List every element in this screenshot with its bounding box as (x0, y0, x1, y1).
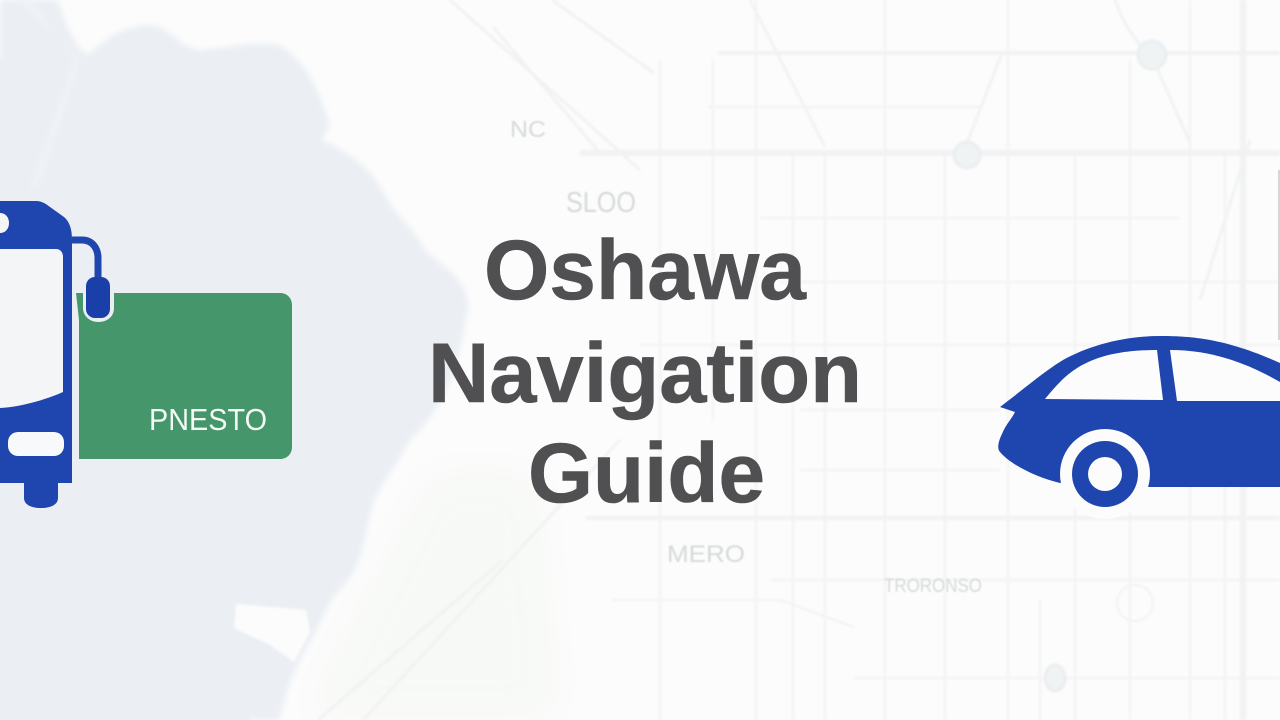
map: land tint (300, 470, 560, 720)
icon: PRESTO card: PNESTO (149, 402, 267, 437)
title (428, 223, 862, 520)
icon: bus (0, 201, 110, 508)
icon: PRESTO card (76, 293, 292, 459)
map: street grid (451, 0, 1279, 719)
icon: car (998, 336, 1280, 519)
title: Navigation (428, 326, 862, 420)
right edge line (1278, 170, 1280, 340)
map labels: SLOO (566, 187, 636, 219)
map: lake water area (0, 0, 468, 720)
map labels: TRORONSO (884, 576, 982, 597)
map labels: NC (510, 116, 546, 142)
map labels (510, 116, 982, 597)
title: Oshawa (484, 223, 807, 317)
title: Guide (528, 426, 765, 520)
map: route nodes (954, 41, 1166, 691)
map: island (234, 604, 310, 662)
map labels: MERO (667, 541, 745, 568)
